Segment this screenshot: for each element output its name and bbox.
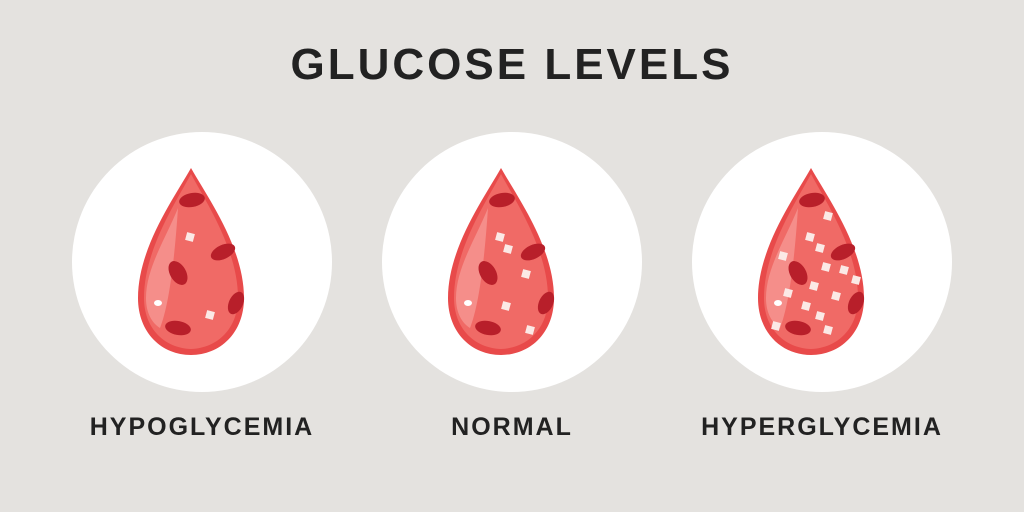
drop: hyperglycemia: [758, 168, 867, 355]
label: hypoglycemia: HYPOGLYCEMIA: [90, 413, 314, 441]
label: normal: NORMAL: [451, 413, 573, 441]
panel: hyperglycemia: [692, 132, 952, 392]
drop: normal: [448, 168, 557, 355]
panel: normal: [382, 132, 642, 392]
panel: hypoglycemia: [72, 132, 332, 392]
label: hyperglycemia: HYPERGLYCEMIA: [701, 413, 943, 441]
drop: hypoglycemia: [138, 168, 247, 355]
title: GLUCOSE LEVELS: [291, 40, 733, 89]
